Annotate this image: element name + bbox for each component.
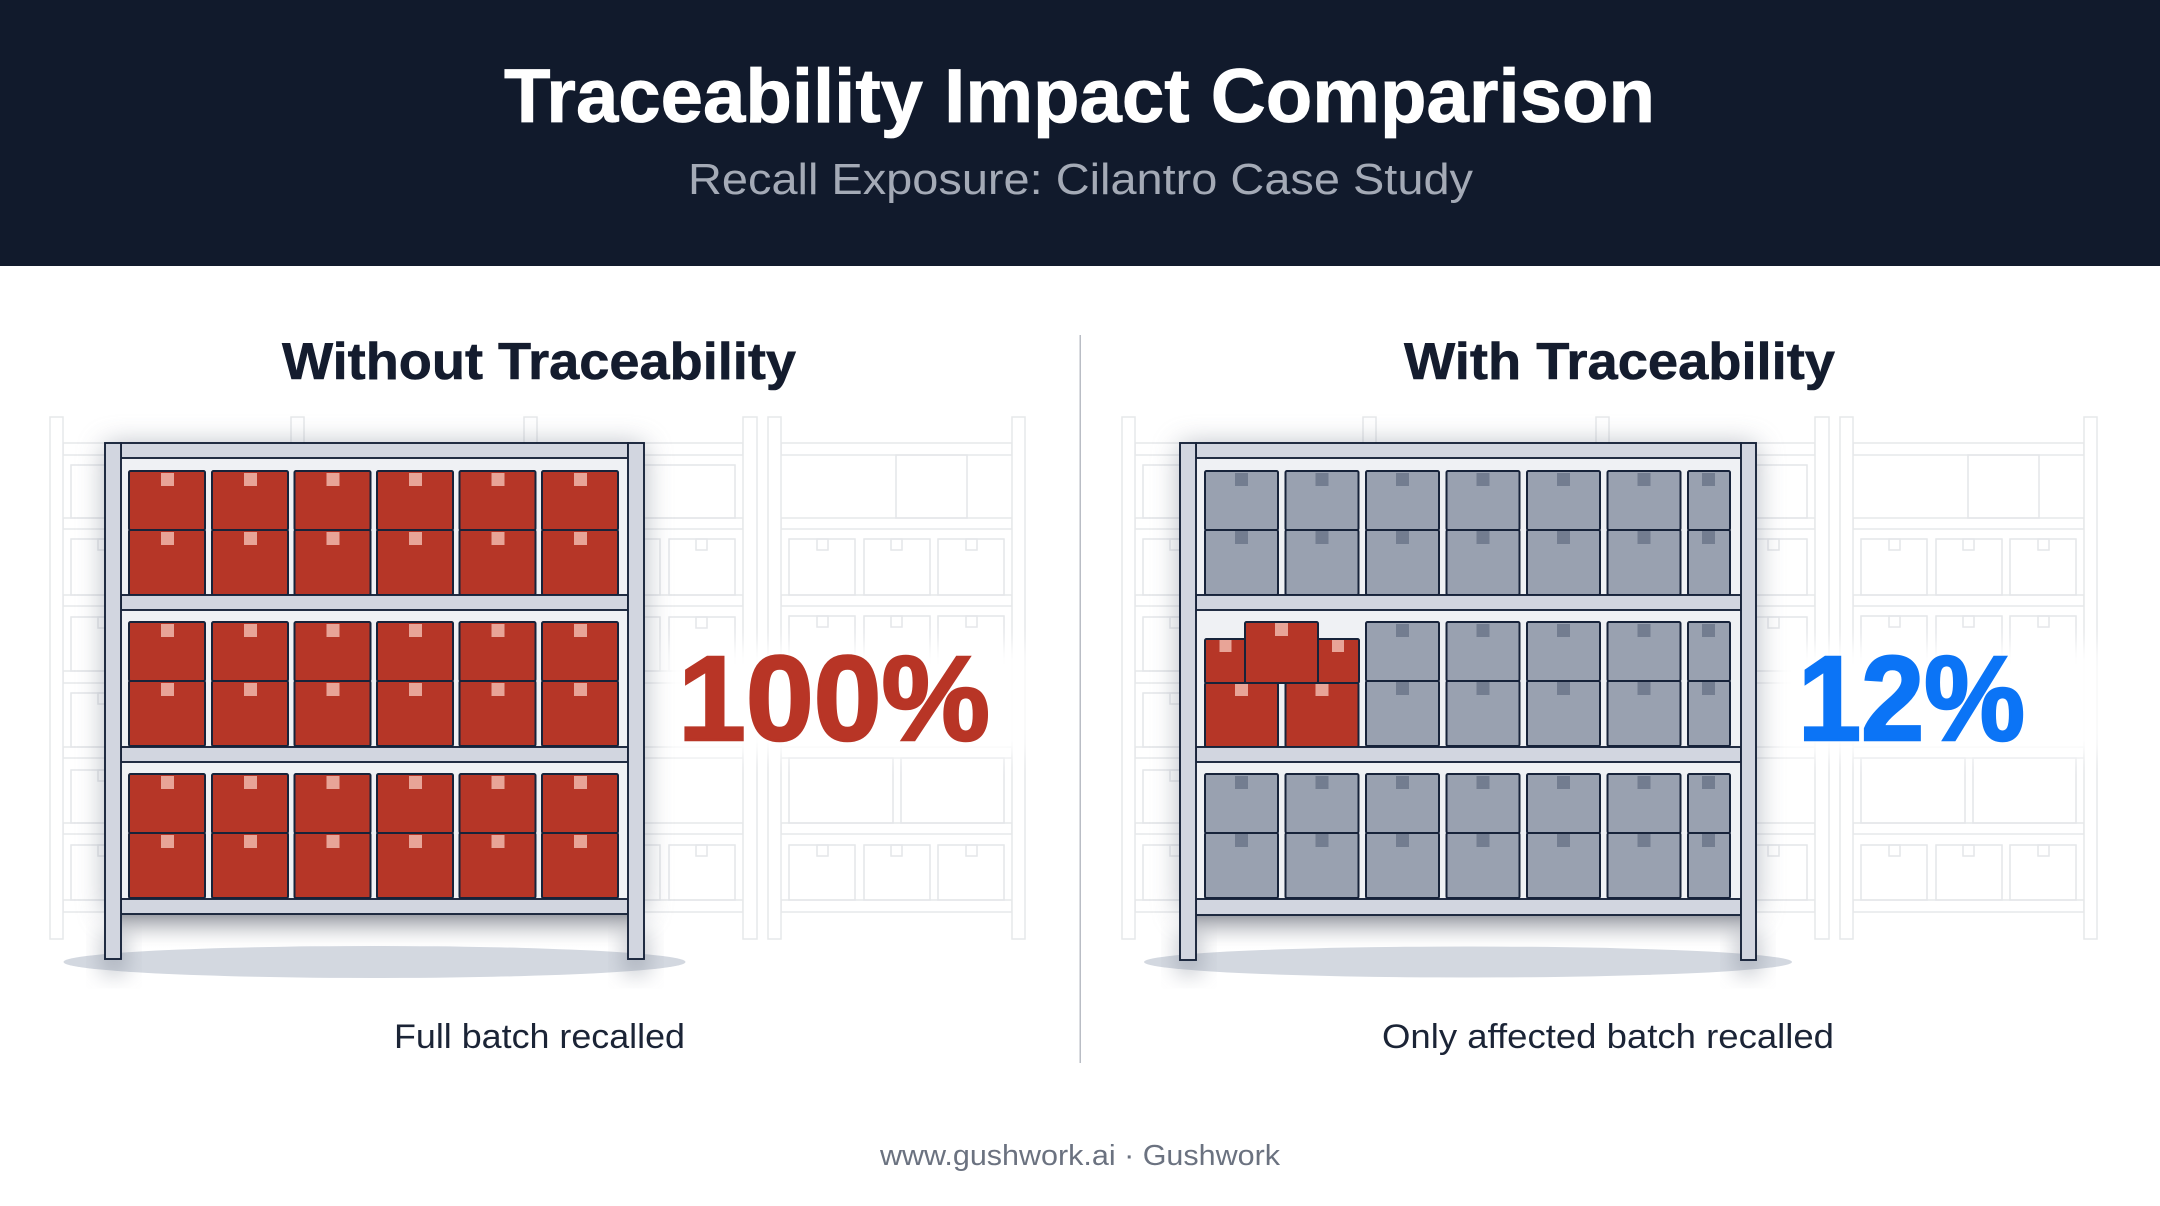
panel: with traceability [1122, 333, 2102, 1056]
background ghost warehouse racks [50, 417, 1025, 939]
stat: 100 percent: 100% [678, 630, 990, 766]
panel: without traceability [50, 333, 1030, 1056]
post foot shadows [1175, 930, 1762, 975]
rack shadow [105, 445, 644, 950]
boxes: middle shelf [129, 622, 618, 746]
background ghost warehouse racks [1122, 417, 2097, 939]
boxes: bottom shelf [1205, 774, 1730, 898]
shelf beams and posts [105, 443, 644, 959]
heading: without traceability: Without Traceability [282, 333, 796, 391]
center divider [1080, 335, 1081, 1063]
boxes: top shelf [1205, 471, 1730, 595]
shelf beams and posts [1180, 443, 1756, 960]
footer credit: www.gushwork.ai · Gushwork [879, 1140, 1281, 1172]
boxes: affected red cluster [1205, 622, 1359, 747]
caption: only affected batch recalled: Only affected batch recalled [1382, 1018, 1834, 1056]
floor shadow ellipse [64, 946, 686, 978]
subtitle: Recall Exposure: Cilantro Case Study [688, 155, 1473, 204]
rack shadow [1180, 445, 1756, 951]
heading: with traceability: With Traceability [1404, 333, 1835, 391]
boxes: bottom shelf [129, 774, 618, 898]
boxes: middle shelf gray [1366, 622, 1730, 746]
white halo behind 100 percent [662, 645, 1030, 755]
boxes: top shelf [129, 471, 618, 595]
shelving rack [105, 443, 644, 959]
shelving rack [1180, 443, 1756, 960]
floor shadow ellipse [1144, 946, 1792, 978]
title: Traceability Impact Comparison [504, 54, 1655, 139]
caption: full batch recalled: Full batch recalled [394, 1018, 685, 1056]
white halo behind 12 percent [1772, 645, 2102, 755]
header band [0, 0, 2160, 266]
post foot shadows [100, 930, 650, 975]
stat: 12 percent: 12% [1798, 630, 2025, 766]
